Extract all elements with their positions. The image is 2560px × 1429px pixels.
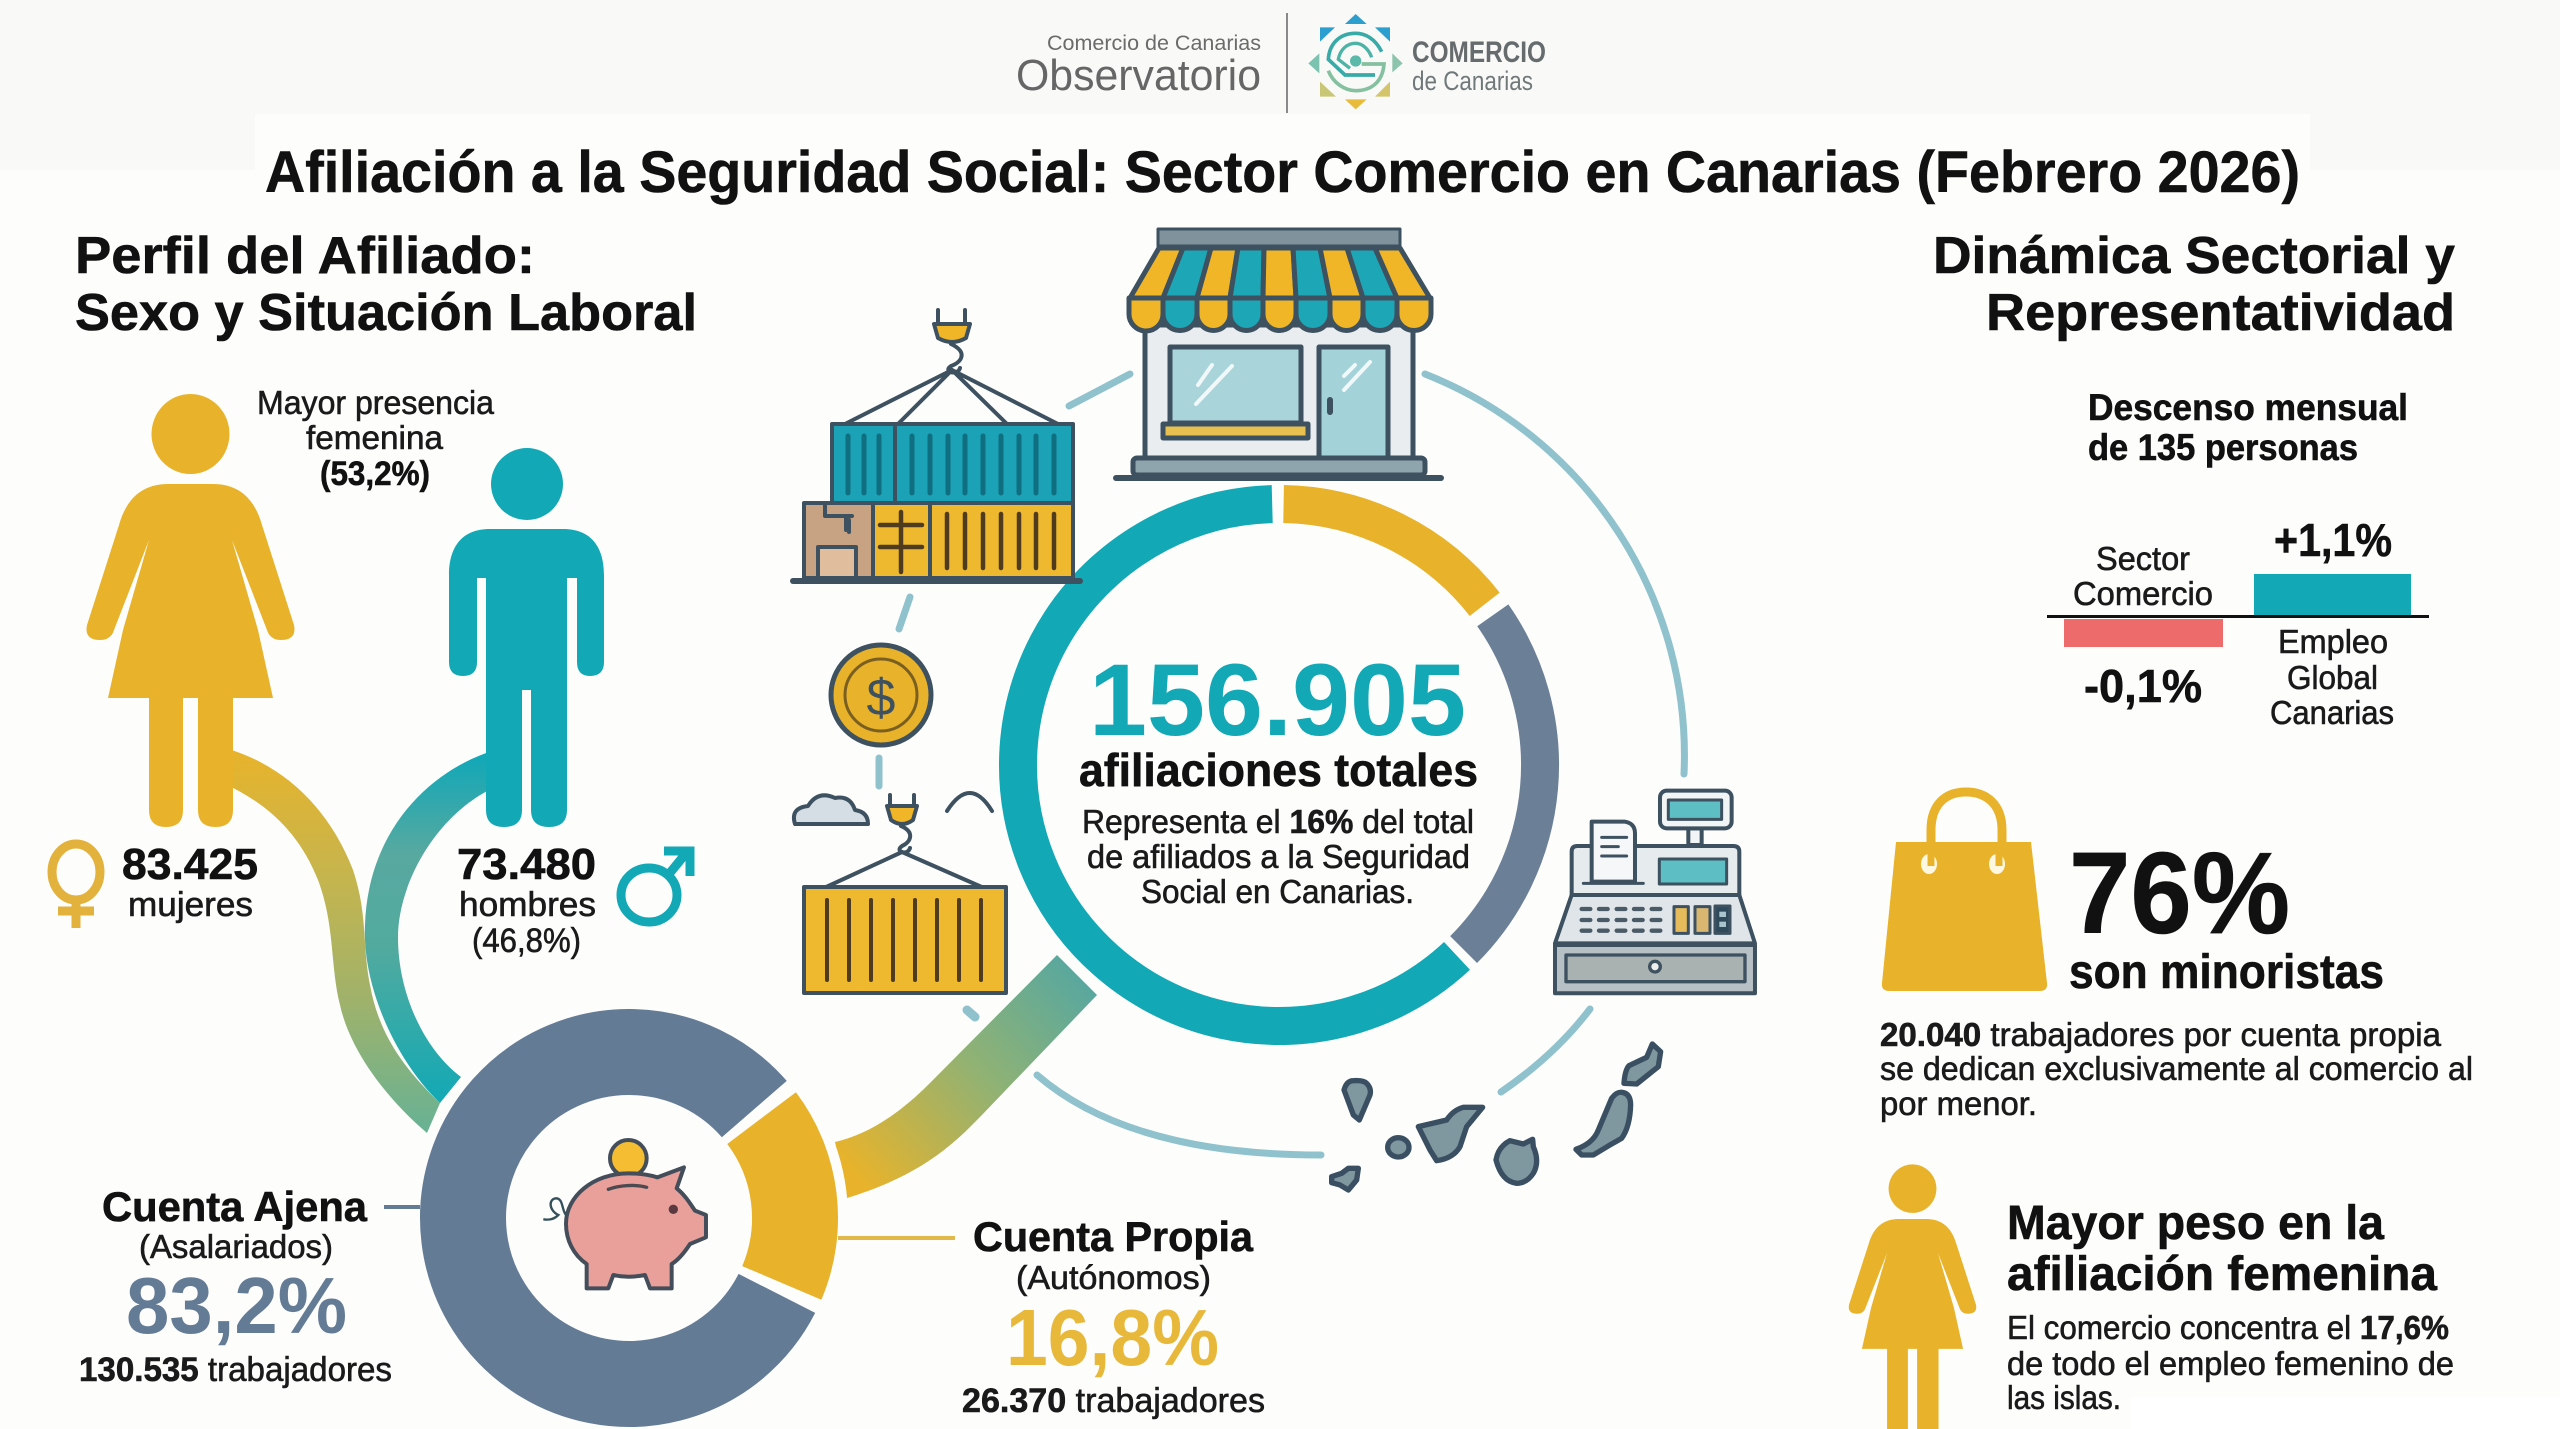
icon: lower hanging container [804, 795, 1006, 993]
callout: mayor presencia femenina [257, 384, 495, 493]
text: descenso mensual [2088, 387, 2408, 468]
label: cuenta ajena: 83,2% [126, 1261, 347, 1350]
bar chart: comercio vs empleo global: Empleo [2278, 623, 2388, 660]
stat: 76% minoristas: por menor. [1880, 1085, 2037, 1122]
header: Observatorio wordmark [1016, 13, 1288, 113]
icon: cash register [1555, 791, 1755, 993]
bar chart: comercio vs empleo global: Canarias [2270, 694, 2394, 731]
icon: male symbol [621, 851, 690, 922]
stat: mujeres: 83.425 [122, 840, 258, 889]
label: cuenta ajena: (Asalariados) [139, 1228, 333, 1265]
heading: perfil del afiliado: Sexo y Situación Laboral [75, 284, 697, 342]
bar chart: comercio vs empleo global: Global [2287, 659, 2378, 696]
label: cuenta ajena: 130.535 trabajadores [79, 1351, 392, 1389]
stat: 76% minoristas: 20.040 trabajadores por cuenta propia [1880, 1016, 2442, 1053]
label: cuenta propia: (Autónomos) [1016, 1259, 1211, 1296]
stat: hombres: hombres [459, 886, 596, 924]
icon: piggy bank [543, 1140, 706, 1288]
stat: 76% minoristas: se dedican exclusivamente al comercio al [1880, 1050, 2473, 1087]
icon: coin: $ [867, 669, 896, 727]
flow ribbon: mujeres to donut [225, 748, 440, 1133]
icon: shopping bag [1882, 792, 2047, 991]
label: cuenta propia [838, 1213, 1265, 1420]
label: cuenta propia: 26.370 trabajadores [962, 1382, 1265, 1420]
center stat: total affiliations: Social en Canarias. [1141, 873, 1414, 910]
icon: man figure [449, 448, 604, 827]
center stat: total affiliations: afiliaciones totales [1079, 744, 1478, 796]
stat: hombres: 73.480 [457, 840, 596, 889]
callout: mayor presencia femenina: femenina [306, 419, 444, 456]
text: descenso mensual: de 135 personas [2088, 427, 2358, 468]
heading: perfil del afiliado: Perfil del Afiliado: [75, 227, 535, 285]
label: cuenta propia: 16,8% [1006, 1293, 1219, 1382]
icon: small woman figure [1849, 1164, 1976, 1429]
icon: Canary Islands map [1332, 1044, 1661, 1190]
text: mayor peso femenino [2007, 1197, 2454, 1416]
main donut ring [1018, 504, 1540, 1026]
center stat: total affiliations: 156.905 [1089, 643, 1466, 757]
callout: mayor presencia femenina: Mayor presencia [257, 384, 495, 421]
title: Afiliación a la Seguridad Social: Sector Comercio en Canarias (Febrero 2026) [265, 140, 2300, 205]
text: mayor peso femenino: El comercio concentra el 17,6% [2007, 1309, 2449, 1346]
stat: 76% minoristas [1880, 828, 2473, 1122]
donut: cuenta ajena / cuenta propia [415, 1004, 843, 1429]
text: mayor peso femenino: Mayor peso en la [2007, 1197, 2384, 1250]
bar chart: comercio vs empleo global: Sector [2096, 540, 2190, 577]
heading: dinámica sectorial [1933, 227, 2455, 342]
heading: dinámica sectorial: Representatividad [1986, 284, 2455, 342]
text: descenso mensual: Descenso mensual [2088, 387, 2408, 428]
header: Comercio de Canarias logo [1308, 14, 1546, 109]
icon: hoisted containers [793, 310, 1080, 581]
header: Comercio de Canarias logo: de Canarias [1412, 66, 1533, 96]
stat: 76% minoristas: 76% [2069, 828, 2290, 958]
icon: female symbol [52, 844, 100, 928]
icon: shop [1116, 229, 1441, 478]
callout: mayor presencia femenina: (53,2%) [320, 455, 430, 493]
label: cuenta ajena: Cuenta Ajena [102, 1183, 368, 1230]
text: mayor peso femenino: afiliación femenina [2007, 1248, 2437, 1301]
stat: mujeres [122, 840, 258, 924]
label: cuenta propia: Cuenta Propia [973, 1213, 1254, 1260]
center stat: total affiliations: de afiliados a la Seguridad [1087, 838, 1470, 875]
stat: hombres [457, 840, 596, 960]
stat: 76% minoristas: son minoristas [2069, 946, 2384, 999]
flow ribbon: total to cuenta propia [835, 955, 1097, 1198]
bar chart: comercio vs empleo global: Comercio [2073, 575, 2213, 612]
bar chart: comercio vs empleo global: -0,1% [2084, 660, 2202, 712]
bar chart: comercio vs empleo global: +1,1% [2274, 514, 2392, 566]
header: Comercio de Canarias logo: COMERCIO [1412, 36, 1546, 69]
text: mayor peso femenino: de todo el empleo femenino de [2007, 1345, 2454, 1382]
icon: clouds [794, 793, 992, 824]
heading: perfil del afiliado [75, 227, 697, 342]
stat: hombres: (46,8%) [472, 922, 581, 960]
text: mayor peso femenino: las islas. [2007, 1379, 2121, 1416]
outer thin circle dashes [879, 374, 1684, 1155]
flow ribbon: hombres to donut [365, 750, 495, 1103]
center stat: total affiliations: Representa el 16% del total [1082, 803, 1474, 840]
icon: coin [831, 645, 931, 745]
center stat: total affiliations [1079, 643, 1478, 910]
header: Observatorio wordmark: Comercio de Canarias [1047, 32, 1261, 55]
heading: dinámica sectorial: Dinámica Sectorial y [1933, 227, 2455, 285]
header: Observatorio wordmark: Observatorio [1016, 51, 1261, 100]
label: cuenta ajena [79, 1183, 420, 1389]
stat: mujeres: mujeres [128, 886, 253, 924]
icon: woman figure [87, 394, 294, 827]
bar chart: comercio vs empleo global [2047, 514, 2429, 731]
